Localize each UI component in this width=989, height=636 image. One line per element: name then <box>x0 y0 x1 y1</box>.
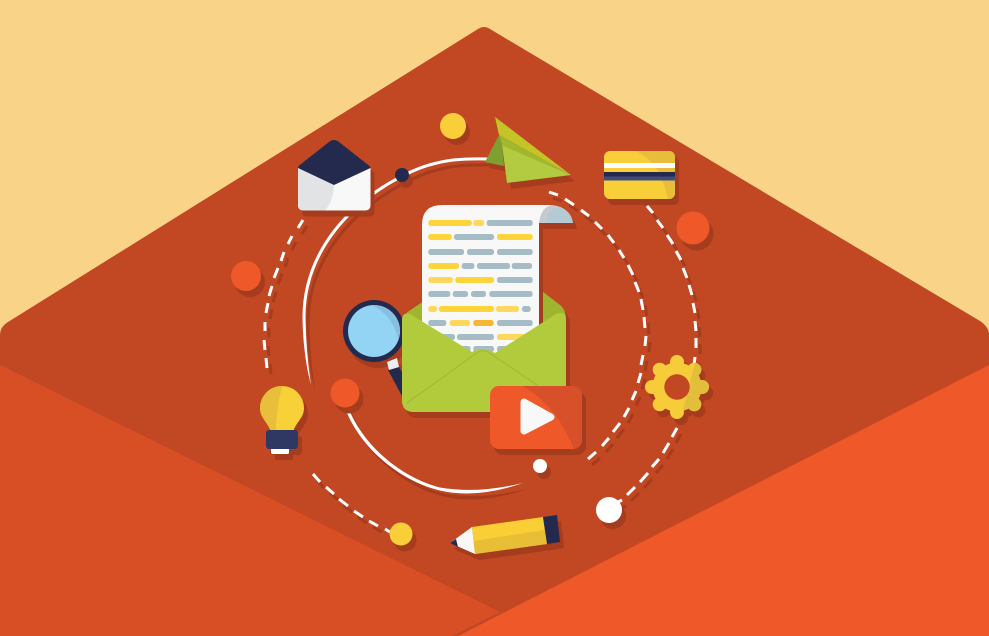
lower left envelope flap <box>0 365 500 636</box>
icon: pencil <box>450 515 560 554</box>
text lines <box>428 220 533 352</box>
gear hole <box>664 374 690 400</box>
outer dashed orbit, lower left <box>313 474 390 532</box>
dot: yellow bottom left <box>390 522 412 546</box>
dot: yellow top <box>440 113 466 139</box>
document sheet <box>422 205 573 360</box>
icon: envelope front <box>402 313 566 412</box>
icon: open mail <box>298 140 370 210</box>
inner dashed orbit <box>549 192 646 459</box>
lower right envelope flap <box>458 365 989 636</box>
outer dashed orbit, right <box>618 206 696 502</box>
icon: credit card <box>604 151 675 199</box>
dot: small white <box>533 459 547 473</box>
icon: light bulb <box>258 384 304 454</box>
dot: navy on orbit <box>395 168 409 182</box>
icon: magnifying glass <box>343 300 402 396</box>
sheet body <box>422 205 573 360</box>
icon: paper plane <box>485 117 571 183</box>
icon: video play button <box>490 386 582 449</box>
inner orbit arc, upper <box>302 159 488 385</box>
dot: orange centre left <box>330 378 360 408</box>
dot: orange left <box>231 261 261 291</box>
outer dashed orbit, left <box>264 220 303 368</box>
dot: orange right <box>676 212 710 244</box>
dot: large white <box>596 497 622 523</box>
icon: gear <box>645 355 709 419</box>
curl highlight <box>546 207 573 223</box>
inner orbit arc, lower <box>345 407 523 493</box>
icon: envelope back <box>402 270 566 412</box>
sheet curl <box>539 205 573 223</box>
